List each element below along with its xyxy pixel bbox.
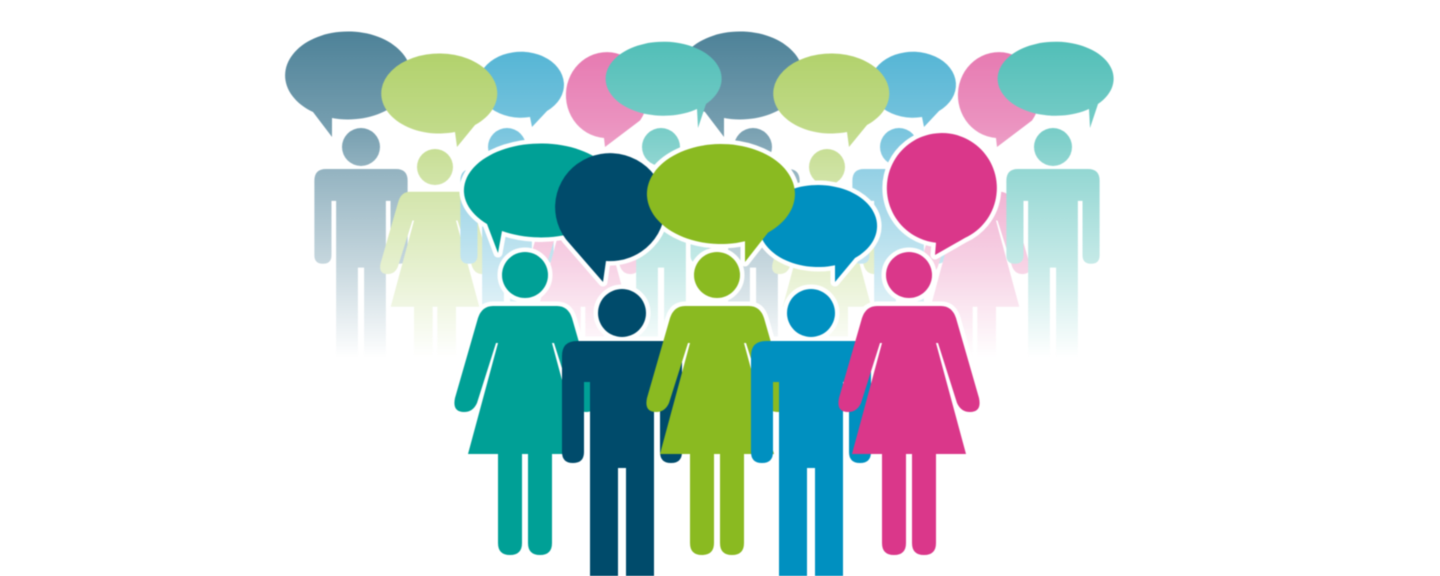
front man: blue (751, 289, 871, 576)
back man: blue (852, 127, 945, 302)
back man: grey (707, 127, 800, 336)
speech bubble: green, left (381, 54, 497, 147)
back woman: pink (532, 240, 636, 336)
back woman: green (380, 148, 483, 342)
back man: blue (460, 127, 554, 304)
front speech bubble: teal (464, 143, 618, 253)
front speech bubble: pink (887, 133, 997, 255)
back woman: green (772, 148, 875, 336)
front woman: pink (838, 252, 980, 555)
front speech bubble: dark blue (555, 153, 665, 282)
back woman: pink (924, 192, 1028, 341)
illustration: crowd with speech bubbles (284, 30, 1114, 576)
front speech bubble: green (647, 144, 795, 262)
speech bubble: pink, left (566, 52, 648, 147)
front man: dark blue (562, 289, 682, 576)
white halo behind front figures and bubbles (454, 133, 997, 576)
back man: teal (636, 127, 708, 336)
back row figures, second set (707, 127, 1100, 344)
speech bubble: pink, right (958, 52, 1040, 147)
speech bubble: green, right (773, 54, 889, 147)
speech bubble: blue, right (870, 52, 956, 127)
back row figures, first set (314, 127, 708, 344)
speech bubble: teal, right (998, 42, 1114, 128)
speech bubble: grey, right (692, 30, 800, 137)
front speech bubble: blue (759, 185, 877, 282)
speech bubble: grey, left (285, 31, 411, 137)
back row speech bubbles (285, 31, 1114, 147)
front woman: teal (454, 252, 596, 555)
back row: faded crowd (284, 30, 1114, 344)
front woman: green (646, 252, 788, 555)
back man: teal (1006, 128, 1100, 370)
speech bubble: teal, left (606, 42, 722, 128)
speech bubble: blue, left (478, 52, 564, 127)
back man: grey (314, 128, 408, 370)
